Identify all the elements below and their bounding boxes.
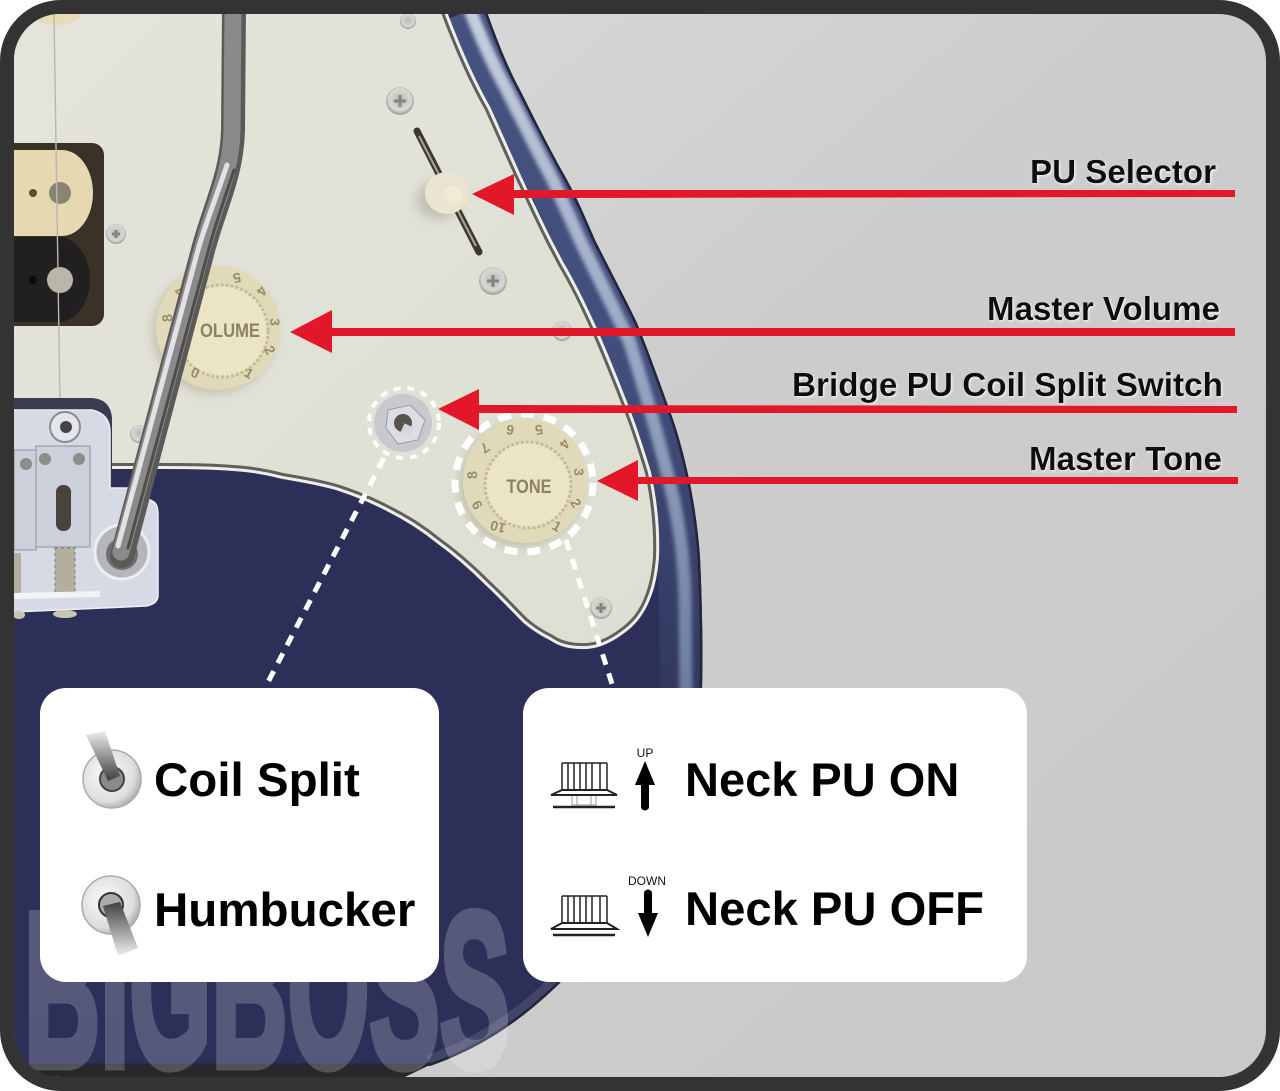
tremolo arm: [118, 10, 234, 556]
icon: toggle up: [83, 731, 141, 808]
icon: knob raised: [551, 763, 617, 807]
pickup cavity and humbucker: [14, 143, 104, 326]
panel: coil split switch states: [40, 688, 439, 982]
icon: arrow down: [628, 874, 666, 937]
black bobbin: [14, 237, 90, 322]
volume knob: 8: [159, 313, 175, 323]
arrow: coil split switch: [438, 389, 1237, 430]
body: midnight blue: [10, 10, 702, 1066]
volume knob: 2: [261, 343, 279, 358]
label: Bridge PU Coil Split Switch: Bridge PU Coil Split Switch: [792, 366, 1223, 403]
tone knob: 6: [505, 421, 515, 439]
label: PU Selector: PU Selector: [1030, 153, 1216, 190]
body edge bevel: [10, 10, 702, 1066]
pickguard screws: [106, 13, 612, 619]
volume knob: 4: [253, 284, 271, 299]
tone knob: TONE: [506, 477, 552, 498]
label: Master Tone: Master Tone: [1029, 440, 1222, 477]
arrow: master volume: [290, 310, 1235, 353]
tone knob: 3: [571, 468, 587, 476]
tone knob: 10: [488, 517, 508, 537]
icon: toggle down: [82, 876, 140, 956]
PU selector switch: [416, 131, 479, 252]
volume knob: 5: [232, 269, 242, 287]
tone highlight: dashed circle and leader: [455, 414, 614, 690]
tone knob: 1: [550, 517, 565, 535]
icon: arrow up: [635, 746, 655, 810]
cream bobbin: [14, 150, 93, 236]
arrow: PU selector: [472, 174, 1235, 215]
text: Neck PU ON: Neck PU ON: [685, 753, 959, 806]
icon: arrow up: UP: [637, 746, 653, 760]
icon: arrow down: DOWN: [628, 874, 666, 888]
shadow strip under body: [30, 1066, 428, 1077]
saddle springs: [55, 548, 75, 595]
tone knob: 9: [468, 497, 486, 512]
high E string: [54, 14, 60, 405]
volume knob: 0: [188, 364, 201, 382]
volume knob: 1: [242, 364, 257, 382]
volume knob: 3: [267, 318, 283, 326]
saddles: [36, 446, 90, 547]
pickguard binding and plate: [10, 10, 653, 643]
tone knob: 2: [567, 496, 585, 511]
guitar body photograph: [0, 0, 702, 1091]
tone knob: [459, 419, 587, 547]
neck pickup screw top: [36, 14, 83, 25]
volume knob: 7: [172, 281, 188, 299]
text: Humbucker: Humbucker: [154, 884, 415, 937]
panel: neck pickup push-pull states: [523, 688, 1027, 982]
icon: knob lowered: [551, 896, 617, 935]
volume knob: [152, 266, 283, 394]
arm socket: [95, 525, 149, 579]
arrow: master tone: [597, 460, 1238, 501]
text: Neck PU OFF: Neck PU OFF: [685, 883, 984, 936]
tone knob: 5: [534, 421, 544, 439]
tone knob: 8: [464, 470, 480, 480]
switch highlight: dashed circle and leader: [266, 388, 439, 686]
tone knob: 4: [556, 436, 574, 452]
text: Coil Split: Coil Split: [154, 754, 360, 807]
tone knob: 7: [477, 439, 493, 457]
volume knob: OLUME: [200, 321, 260, 342]
label: Master Volume: Master Volume: [987, 290, 1220, 327]
bridge assembly: [10, 398, 158, 619]
coil split toggle switch photo: [374, 394, 432, 452]
